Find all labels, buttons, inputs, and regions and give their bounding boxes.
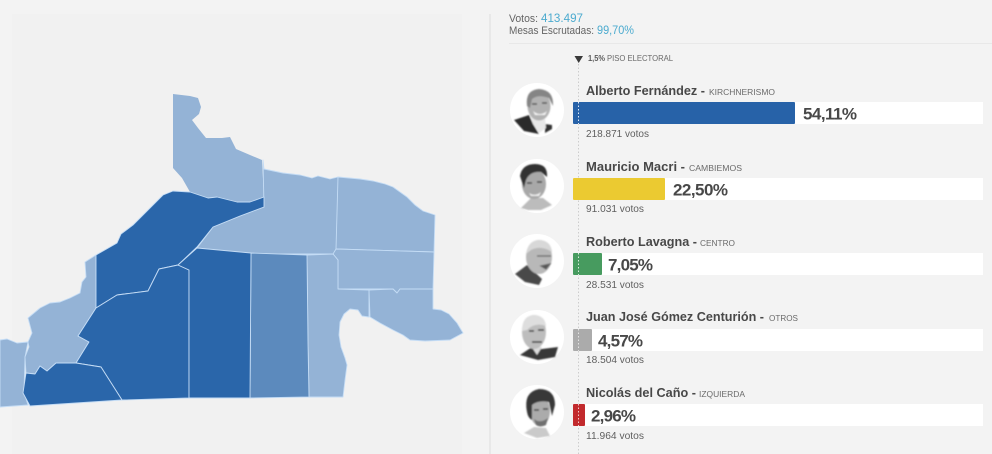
region: far west department [0, 339, 28, 407]
totals header: Votos: [509, 13, 538, 25]
vote count: 11.964 votos [586, 431, 644, 442]
bar: 54,11% [573, 102, 795, 124]
totals header: Mesas Escrutadas: [509, 25, 594, 37]
region: dark blue south-west department [23, 363, 122, 406]
region: dark blue eastern department [178, 248, 251, 398]
region: medium blue department [250, 253, 309, 398]
white bar track [573, 253, 983, 275]
candidate row: Nicolás del Caño: IZQUIERDA [699, 390, 746, 399]
portrait: Nicolás del Caño [510, 385, 564, 439]
electoral threshold marker: 1,5% [588, 54, 605, 63]
name and party: Juan José Gómez Centurión - [586, 309, 764, 324]
white bar track [573, 329, 983, 351]
electoral threshold marker [574, 54, 674, 63]
candidate row: Mauricio Macri: CAMBIEMOS [689, 164, 742, 173]
candidate row: Mauricio Macri [510, 159, 983, 215]
totals header: 99,70% [597, 23, 634, 37]
vote count: 91.031 votos [586, 204, 644, 215]
name and party: Roberto Lavagna - [586, 234, 697, 249]
portrait: Roberto Lavagna [510, 234, 564, 288]
map: election results by department [0, 94, 463, 407]
name and party: Alberto Fernández - [586, 83, 705, 98]
bar: 4,57% [573, 329, 592, 351]
candidate row: Roberto Lavagna [510, 234, 983, 291]
region: western department [25, 255, 96, 374]
percentage: 2,96% [591, 406, 636, 426]
bar: 22,50% [573, 178, 665, 200]
region: north-central department [197, 160, 338, 254]
region: dark blue north-west department [96, 191, 264, 308]
white bar track [573, 102, 983, 124]
name and party: Mauricio Macri - [586, 159, 685, 174]
candidate row: Roberto Lavagna: CENTRO [700, 239, 735, 248]
bar: 7,05% [573, 253, 602, 275]
white bar track [573, 178, 983, 200]
bar: 2,96% [573, 404, 585, 426]
percentage: 4,57% [598, 332, 643, 350]
portrait: Mauricio Macri [510, 159, 564, 213]
candidate row: Nicolás del Caño [510, 385, 983, 442]
candidate row: Alberto Fernández [510, 83, 983, 140]
percentage: 54,11% [803, 104, 857, 124]
candidate row: Alberto Fernández: KIRCHNERISMO [709, 88, 775, 97]
candidate row: Juan José Gómez Centurión [510, 309, 983, 366]
percentage: 7,05% [608, 256, 653, 274]
white bar track [573, 404, 983, 426]
region: southern coastal department [307, 254, 369, 397]
electoral threshold marker: PISO ELECTORAL [607, 54, 674, 63]
region: south-eastern peninsula department [369, 289, 463, 341]
region: eastern department [333, 249, 434, 293]
candidate row: Juan José Gómez Centurión: OTROS [769, 314, 798, 323]
totals header: 413.497 [541, 11, 583, 25]
portrait: Juan José Gómez Centurión [510, 310, 564, 364]
vote count: 18.504 votos [586, 355, 644, 366]
name and party: Nicolás del Caño - [586, 385, 696, 400]
region: northern department [173, 94, 264, 202]
vote count: 218.871 votos [586, 129, 649, 140]
region: north-eastern department [336, 177, 435, 252]
percentage: 22,50% [673, 180, 728, 200]
totals header [509, 11, 634, 37]
portrait: Alberto Fernández [510, 83, 564, 137]
vote count: 28.531 votos [586, 280, 644, 291]
region: dark blue central department [76, 265, 189, 400]
